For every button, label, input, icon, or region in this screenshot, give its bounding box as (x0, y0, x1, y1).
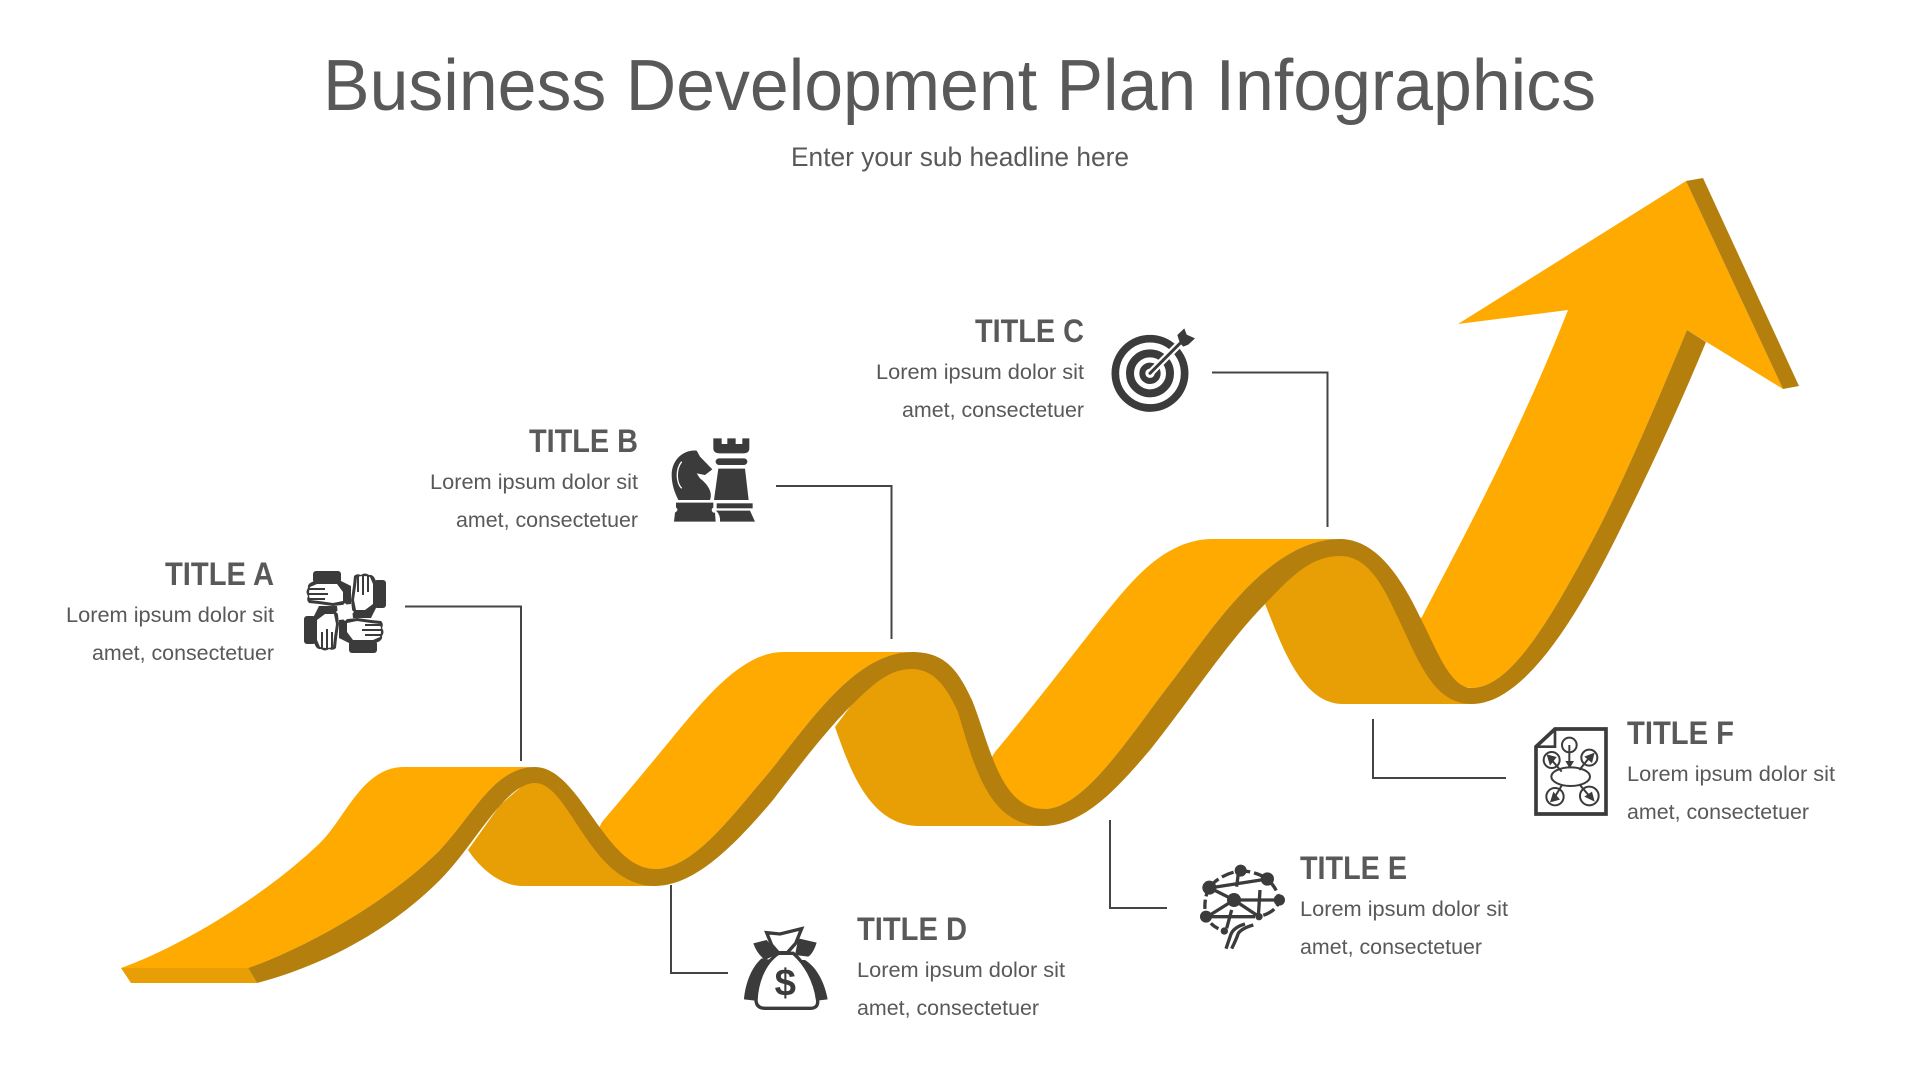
ribbon: back fold 1 (468, 775, 655, 886)
connector F (1373, 719, 1506, 778)
title: Business Development Plan Infographics (323, 46, 1596, 126)
text block B: amet, consectetuer (456, 509, 638, 532)
text block F: Lorem ipsum dolor sit (1627, 763, 1835, 786)
text block D: amet, consectetuer (857, 997, 1039, 1020)
text block C: amet, consectetuer (902, 399, 1084, 422)
connector C (1212, 372, 1328, 527)
text block A: amet, consectetuer (92, 642, 274, 665)
connector A (405, 606, 521, 761)
icon: brain network (1200, 865, 1285, 949)
text block A: Lorem ipsum dolor sit (66, 604, 274, 627)
text block B: TITLE B (529, 423, 638, 459)
icon: four joined hands (304, 571, 386, 653)
text block F: TITLE F (1627, 715, 1734, 751)
ribbon: arrow head edge (1686, 178, 1799, 389)
text block D: TITLE D (857, 911, 967, 947)
text block E: TITLE E (1300, 850, 1407, 886)
icon: money bag: $ (775, 961, 796, 1004)
text block B (430, 423, 638, 532)
text block E (1300, 850, 1508, 959)
ribbon: start edge (121, 968, 257, 983)
ribbon: front face 1 (121, 767, 535, 968)
icon: target with arrow (1115, 328, 1195, 408)
icon: money bag (744, 929, 828, 1008)
ribbon: arrow face with head (1416, 181, 1783, 688)
text block C: Lorem ipsum dolor sit (876, 361, 1084, 384)
connector D (671, 885, 728, 973)
ribbon: back fold 3 (1265, 547, 1472, 704)
connector E (1110, 820, 1167, 908)
text block E: amet, consectetuer (1300, 936, 1482, 959)
text block E: Lorem ipsum dolor sit (1300, 898, 1508, 921)
text block C: TITLE C (975, 313, 1084, 349)
text block D (857, 911, 1065, 1020)
text block C (876, 313, 1084, 422)
text block F: amet, consectetuer (1627, 801, 1809, 824)
rising ribbon arrow (121, 178, 1799, 983)
ribbon: back fold 2 (835, 660, 1044, 826)
text block A (66, 556, 274, 665)
text block F (1627, 715, 1835, 824)
subtitle: Enter your sub headline here (791, 142, 1129, 172)
ribbon: dark edge band (248, 330, 1706, 983)
icon: document with diagram (1536, 729, 1606, 814)
text block A: TITLE A (165, 556, 274, 592)
icon: chess knight and rook (672, 438, 755, 522)
connector B (776, 486, 892, 639)
text block B: Lorem ipsum dolor sit (430, 471, 638, 494)
ribbon: front face 3 (990, 539, 1340, 810)
ribbon: front face 2 (598, 652, 912, 875)
text block D: Lorem ipsum dolor sit (857, 959, 1065, 982)
